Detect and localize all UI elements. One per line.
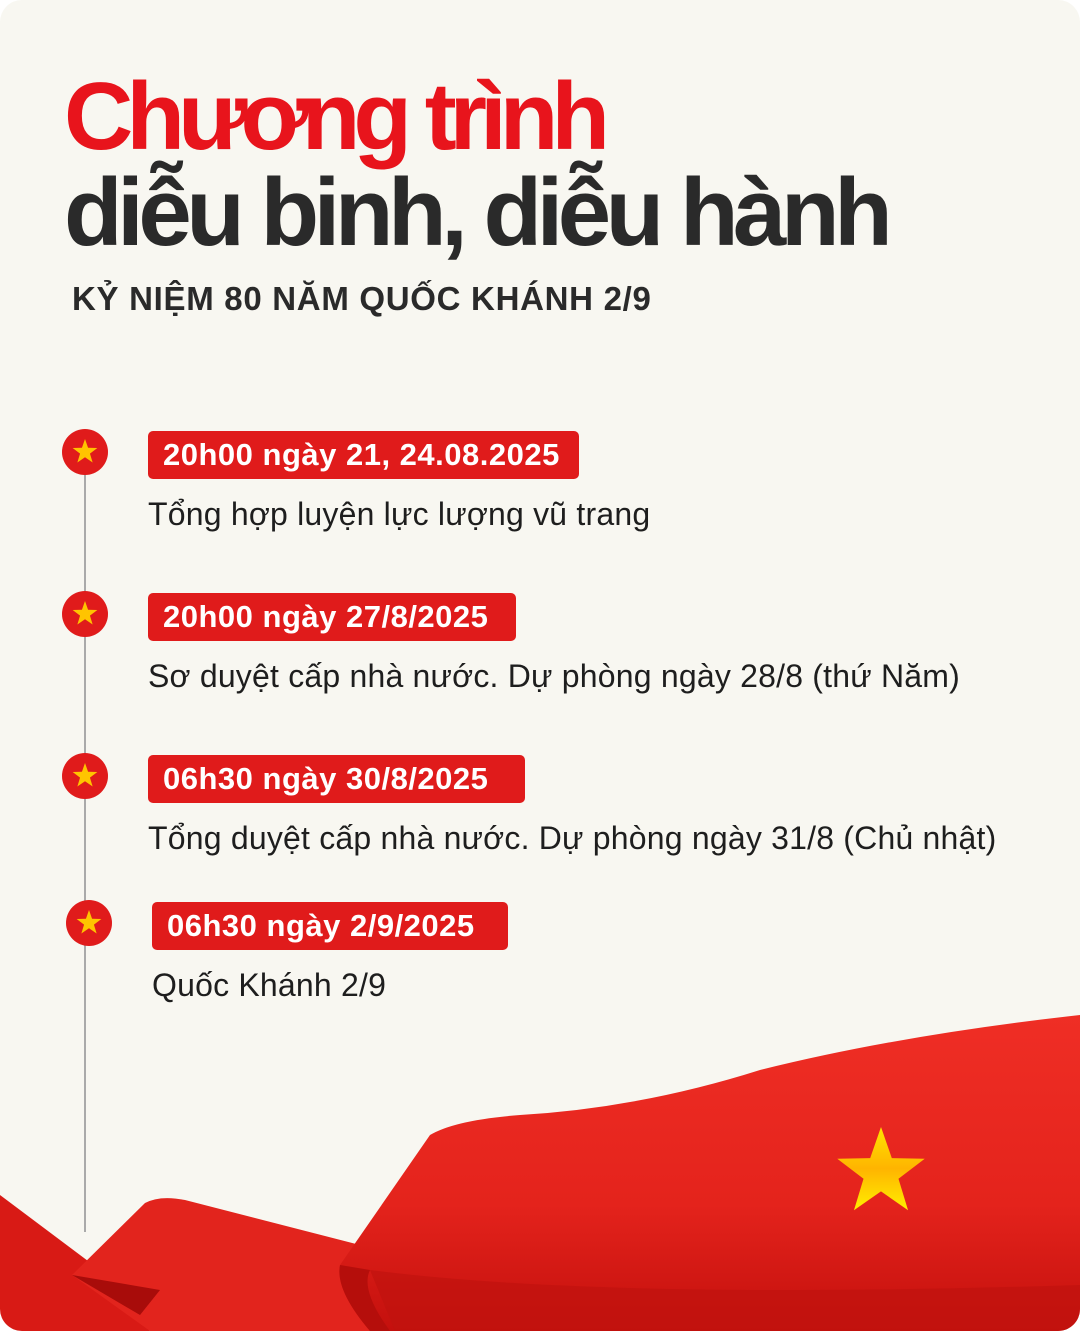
date pill 2 bbox=[148, 593, 516, 641]
date pill 3: 06h30 ngày 30/8/2025 bbox=[163, 761, 488, 796]
subtitle: KỶ NIỆM 80 NĂM QUỐC KHÁNH 2/9 bbox=[72, 280, 652, 317]
icon: star marker 3 bbox=[62, 753, 108, 799]
description 2: Sơ duyệt cấp nhà nước. Dự phòng ngày 28/8 (thứ Năm) bbox=[148, 658, 960, 694]
timeline line bbox=[84, 452, 86, 1232]
date pill 1: 20h00 ngày 21, 24.08.2025 bbox=[163, 437, 560, 472]
middle fold bbox=[72, 1198, 390, 1331]
back ribbon bbox=[0, 1195, 150, 1331]
icon: star marker 4 bbox=[66, 900, 112, 946]
icon: star marker 2 bbox=[62, 591, 108, 637]
description 1: Tổng hợp luyện lực lượng vũ trang bbox=[148, 496, 650, 532]
date pill 3 bbox=[148, 755, 525, 803]
date pill 4: 06h30 ngày 2/9/2025 bbox=[167, 908, 475, 943]
title line 1: Chương trình bbox=[64, 63, 603, 170]
date pill 4 bbox=[152, 902, 508, 950]
date pill 1 bbox=[148, 431, 579, 479]
description 4: Quốc Khánh 2/9 bbox=[152, 967, 386, 1003]
date pill 2: 20h00 ngày 27/8/2025 bbox=[163, 599, 488, 634]
description 3: Tổng duyệt cấp nhà nước. Dự phòng ngày 31/8 (Chủ nhật) bbox=[148, 820, 996, 856]
main flag bbox=[339, 1015, 1080, 1331]
icon: flag star bbox=[837, 1127, 925, 1210]
icon: star marker 1 bbox=[62, 429, 108, 475]
title line 2: diễu binh, diễu hành bbox=[64, 159, 887, 266]
